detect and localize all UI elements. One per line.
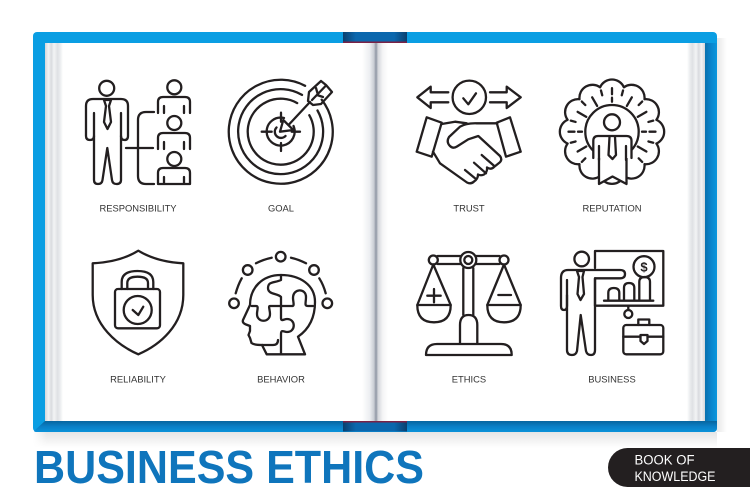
book pages <box>45 43 705 421</box>
panel: goal <box>229 80 333 213</box>
label: trust: TRUST <box>453 202 485 213</box>
panel: responsibility <box>86 80 190 213</box>
panel: behavior <box>229 252 332 384</box>
panel: reputation <box>560 80 664 213</box>
label: behavior: BEHAVIOR <box>257 374 305 384</box>
badge: book of knowledge: KNOWLEDGE <box>634 469 716 484</box>
icon: manager with team <box>86 80 190 184</box>
label: ethics: ETHICS <box>452 374 486 384</box>
label: responsibility: RESPONSIBILITY <box>99 202 177 213</box>
label: goal: GOAL <box>268 202 294 213</box>
icon: head with puzzle pieces <box>229 252 332 354</box>
panel: trust <box>417 81 521 213</box>
icon: balance scales <box>417 252 521 355</box>
icon: award rosette with person <box>560 80 664 184</box>
badge: book of knowledge <box>608 448 750 487</box>
label: business: BUSINESS <box>588 374 636 384</box>
label: reputation: REPUTATION <box>582 202 642 213</box>
panel: business <box>561 251 663 384</box>
icon: target with arrow <box>229 80 333 184</box>
book cover <box>33 32 717 432</box>
panel: reliability <box>93 251 183 384</box>
icon: presenter with chart and briefcase <box>561 251 663 355</box>
panel: ethics <box>417 252 521 384</box>
title: BUSINESS ETHICS <box>34 441 424 493</box>
text: dollar sign: $ <box>640 260 648 274</box>
badge: book of knowledge: BOOK OF <box>634 452 694 468</box>
icon: handshake with check <box>417 81 521 183</box>
label: reliability: RELIABILITY <box>110 374 167 384</box>
book: cover and pages <box>33 32 727 448</box>
icon: shield with padlock <box>93 251 183 354</box>
